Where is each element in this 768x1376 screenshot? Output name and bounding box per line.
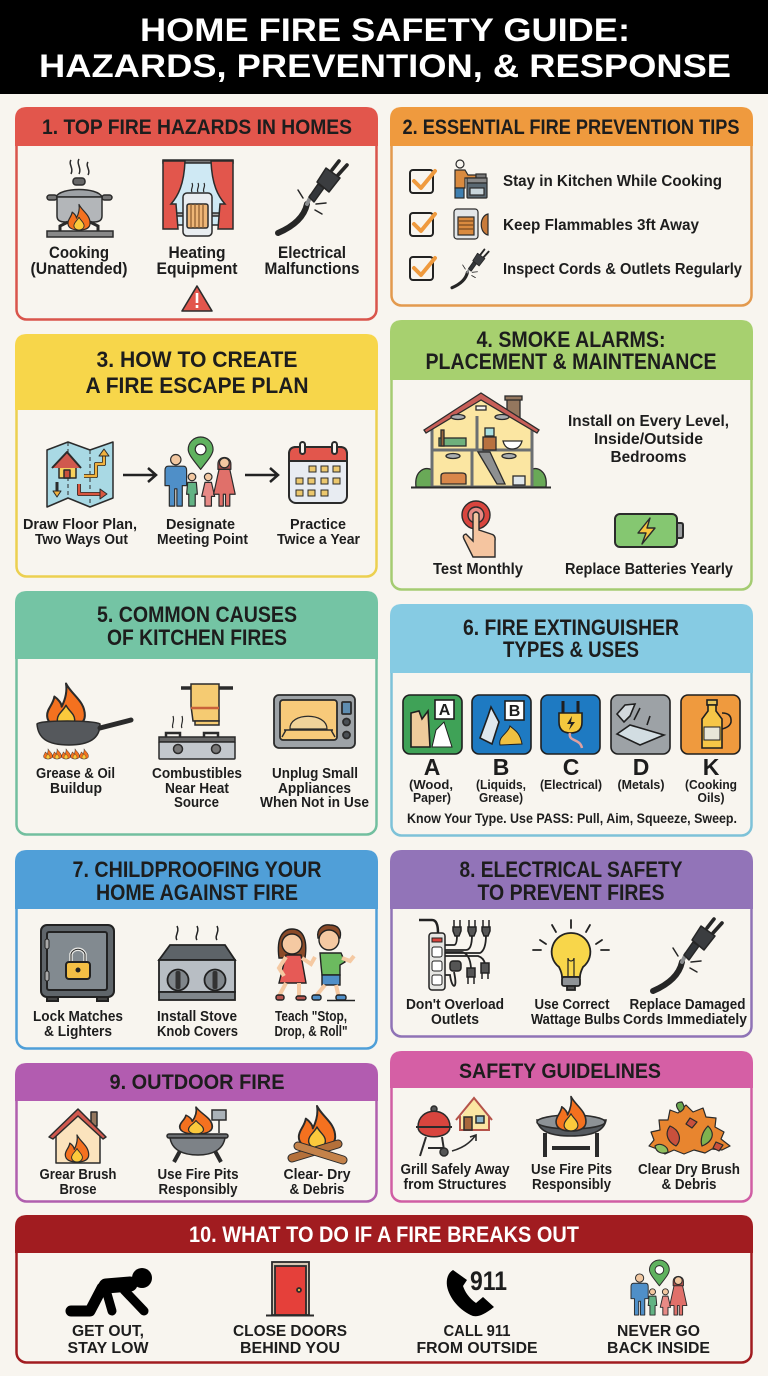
- heading: 4. SMOKE ALARMS:: [476, 327, 666, 352]
- class descriptions: Grease): [479, 790, 523, 805]
- class descriptions: Paper): [413, 790, 451, 805]
- icon: toaster oven: [274, 695, 355, 748]
- kitchen labels: Appliances: [278, 781, 351, 797]
- icon: person at stove: [455, 160, 487, 198]
- tip labels: [503, 173, 742, 278]
- outdoor labels: & Debris: [290, 1182, 344, 1198]
- class descriptions: [409, 777, 737, 805]
- kitchen labels: Buildup: [50, 781, 102, 797]
- outdoor labels: Clear- Dry: [284, 1167, 350, 1183]
- heading: SAFETY GUIDELINES: [459, 1060, 661, 1083]
- icon: damaged plug: [278, 161, 347, 233]
- action labels: STAY LOW: [68, 1340, 149, 1357]
- install text: Bedrooms: [610, 449, 687, 466]
- tip labels: Keep Flammables 3ft Away: [503, 217, 699, 234]
- arrow: [245, 468, 278, 482]
- electrical labels: Wattage Bulbs: [531, 1012, 620, 1028]
- icon: floor plan map: [47, 442, 113, 507]
- guideline labels: Use Fire Pits: [531, 1162, 612, 1178]
- icon: fire pit: [537, 1096, 606, 1157]
- icon: cord: [452, 250, 489, 288]
- panel: 9 outdoor fire: [15, 1063, 378, 1202]
- icon: phone 911: 911: [470, 1266, 507, 1296]
- electrical labels: Don't Overload: [406, 997, 504, 1013]
- childproofing labels: Drop, & Roll": [274, 1024, 348, 1040]
- hazard labels: (Unattended): [30, 260, 128, 278]
- heading: 8. ELECTRICAL SAFETY: [460, 857, 683, 882]
- outdoor labels: Grear Brush: [40, 1167, 116, 1183]
- heading: 6. FIRE EXTINGUISHER: [463, 615, 679, 640]
- heading: 9. OUTDOOR FIRE: [110, 1071, 284, 1094]
- guideline labels: [400, 1162, 740, 1193]
- plan labels: Draw Floor Plan,: [23, 516, 137, 533]
- alarm labels: Test Monthly: [433, 561, 523, 578]
- icon: phone 911: [447, 1266, 507, 1316]
- title banner: HOME FIRE SAFETY GUIDE:: [140, 12, 630, 48]
- icon: towel above stove: [159, 684, 235, 759]
- electrical labels: Replace Damaged: [630, 997, 746, 1013]
- heading: [97, 602, 297, 650]
- title banner: HAZARDS, PREVENTION, & RESPONSE: [39, 48, 731, 84]
- heading: [72, 857, 322, 905]
- plan labels: Meeting Point: [157, 531, 248, 548]
- outdoor labels: [40, 1167, 350, 1198]
- tile: class C: [541, 695, 600, 754]
- class descriptions: (Wood,: [409, 777, 453, 792]
- icon: family with pin: [631, 1260, 687, 1315]
- icon: heater by window: [163, 160, 233, 236]
- install text: Inside/Outside: [594, 431, 703, 448]
- panel: safety guidelines: [390, 1051, 753, 1202]
- icon: test button with hand: [462, 501, 495, 557]
- heading: [426, 327, 716, 374]
- electrical labels: Use Correct: [534, 997, 610, 1013]
- icon: light bulb: [533, 920, 609, 990]
- action labels: CLOSE DOORS: [233, 1323, 347, 1340]
- heading: 7. CHILDPROOFING YOUR: [72, 857, 322, 882]
- icon: flaming pan: [37, 684, 131, 759]
- hazard labels: Cooking: [49, 244, 109, 262]
- kitchen labels: [36, 766, 369, 811]
- checkboxes: [410, 170, 435, 280]
- panel: 7 childproofing: [15, 850, 378, 1048]
- heading: TYPES & USES: [503, 637, 639, 662]
- guideline labels: Grill Safely Away: [400, 1162, 510, 1178]
- heading: 3. HOW TO CREATE: [96, 347, 298, 372]
- hazard labels: Heating: [168, 244, 226, 262]
- tile: class A: A: [439, 702, 451, 719]
- heading: 5. COMMON CAUSES: [97, 602, 297, 627]
- plan labels: [23, 516, 360, 548]
- tip labels: Stay in Kitchen While Cooking: [503, 173, 722, 190]
- guideline labels: Responsibly: [532, 1177, 611, 1193]
- childproofing labels: Teach "Stop,: [275, 1009, 347, 1025]
- class letters: C: [563, 754, 579, 780]
- childproofing labels: [33, 1009, 348, 1040]
- heading: [463, 615, 679, 662]
- icon: damaged cord: [653, 919, 722, 991]
- hazard labels: Electrical: [278, 244, 346, 262]
- class descriptions: (Cooking: [685, 777, 737, 792]
- tile: class D: [611, 695, 670, 754]
- class letters: A: [424, 754, 440, 780]
- heading: PLACEMENT & MAINTENANCE: [426, 349, 716, 374]
- icon: crawling person: [71, 1268, 152, 1311]
- icon: calendar: [289, 442, 347, 503]
- class descriptions: (Electrical): [540, 777, 602, 792]
- install text: [568, 413, 729, 466]
- action labels: NEVER GO: [617, 1323, 700, 1340]
- icon: grill away from house: [416, 1098, 492, 1156]
- class letters: K: [703, 754, 720, 780]
- class letters: D: [633, 754, 649, 780]
- childproofing labels: & Lighters: [44, 1024, 112, 1040]
- icon: battery: [615, 514, 683, 547]
- heading: 1. TOP FIRE HAZARDS IN HOMES: [42, 116, 352, 139]
- icon: family at meeting point: [165, 437, 235, 506]
- class letters: B: [493, 754, 509, 780]
- plan labels: Twice a Year: [277, 531, 360, 548]
- action labels: BEHIND YOU: [240, 1340, 340, 1357]
- class descriptions: (Metals): [618, 777, 664, 792]
- icon: fire pit with spatula: [167, 1107, 228, 1162]
- icon: pot on burner: [47, 159, 113, 237]
- kitchen labels: When Not in Use: [260, 795, 369, 811]
- panel: 8 electrical safety: [390, 850, 753, 1036]
- action labels: CALL 911: [444, 1323, 511, 1340]
- title banner: [0, 0, 768, 94]
- install text: Install on Every Level,: [568, 413, 729, 430]
- kitchen labels: Near Heat: [165, 781, 229, 797]
- class descriptions: (Liquids,: [476, 777, 526, 792]
- alarm labels: [433, 561, 733, 578]
- tile: class A: [403, 695, 462, 754]
- icon: locked safe: [41, 925, 114, 1001]
- heading: [460, 857, 683, 905]
- alarm labels: Replace Batteries Yearly: [565, 561, 733, 578]
- hazard labels: Malfunctions: [264, 260, 360, 278]
- icon: warning triangle: [182, 286, 212, 311]
- icon: campfire: [292, 1106, 343, 1160]
- heading: TO PREVENT FIRES: [478, 880, 664, 905]
- outdoor labels: Use Fire Pits: [158, 1167, 238, 1183]
- icon: house cross-section: [411, 393, 551, 488]
- kitchen labels: Unplug Small: [272, 766, 358, 782]
- tile: class B: [472, 695, 531, 754]
- kitchen labels: Grease & Oil: [36, 766, 115, 782]
- electrical labels: Outlets: [431, 1012, 479, 1028]
- icon: heater and flammable: [454, 209, 488, 239]
- heading: 10. WHAT TO DO IF A FIRE BREAKS OUT: [189, 1222, 579, 1247]
- electrical labels: Cords Immediately: [623, 1012, 747, 1028]
- heading: OF KITCHEN FIRES: [107, 625, 287, 650]
- childproofing labels: Lock Matches: [33, 1009, 123, 1025]
- icon: overloaded power strip: [419, 920, 490, 990]
- action labels: FROM OUTSIDE: [416, 1340, 538, 1357]
- childproofing labels: Knob Covers: [157, 1024, 238, 1040]
- class descriptions: Oils): [698, 790, 724, 805]
- panel: 5 kitchen fires: [15, 591, 378, 834]
- guideline labels: & Debris: [662, 1177, 716, 1193]
- plan labels: Designate: [166, 516, 235, 533]
- kitchen labels: Combustibles: [152, 766, 242, 782]
- outdoor labels: Responsibly: [158, 1182, 238, 1198]
- PASS note: Know Your Type. Use PASS: Pull, Aim, Squeeze, Sweep.: [407, 810, 737, 826]
- tile: class K: [681, 695, 740, 754]
- heading: [86, 347, 308, 398]
- icon: closed door: [266, 1262, 314, 1316]
- action labels: GET OUT,: [72, 1323, 144, 1340]
- plan labels: Practice: [290, 516, 346, 533]
- panel: 2 prevention tips: [390, 107, 753, 306]
- childproofing labels: Install Stove: [157, 1009, 237, 1025]
- panel: 4 smoke alarms: [390, 320, 753, 590]
- icon: pile of leaves: [649, 1102, 730, 1154]
- class letters: [424, 754, 720, 780]
- hazard labels: [30, 244, 360, 278]
- action labels: BACK INSIDE: [607, 1340, 710, 1357]
- tile: class B: B: [509, 703, 520, 720]
- plan labels: Two Ways Out: [35, 531, 128, 548]
- electrical labels: [406, 997, 747, 1028]
- icon: house on fire: [49, 1109, 106, 1163]
- heading: HOME AGAINST FIRE: [96, 880, 298, 905]
- kitchen labels: Source: [174, 795, 219, 811]
- guideline labels: Clear Dry Brush: [638, 1162, 740, 1178]
- guideline labels: from Structures: [404, 1177, 506, 1193]
- panel: 6 extinguisher types: [390, 604, 753, 836]
- hazard labels: Equipment: [156, 260, 238, 278]
- tip labels: Inspect Cords & Outlets Regularly: [503, 261, 742, 278]
- panel: 1 top fire hazards: [15, 107, 378, 320]
- action labels: [68, 1323, 710, 1357]
- arrow: [123, 468, 156, 482]
- icon: children stop drop roll: [276, 925, 355, 1000]
- panel: 3 escape plan: [15, 334, 378, 576]
- outdoor labels: Brose: [60, 1182, 96, 1198]
- panel: 10 what to do: [15, 1215, 753, 1362]
- heading: A FIRE ESCAPE PLAN: [86, 373, 308, 398]
- icon: stove knob covers: [159, 926, 235, 1000]
